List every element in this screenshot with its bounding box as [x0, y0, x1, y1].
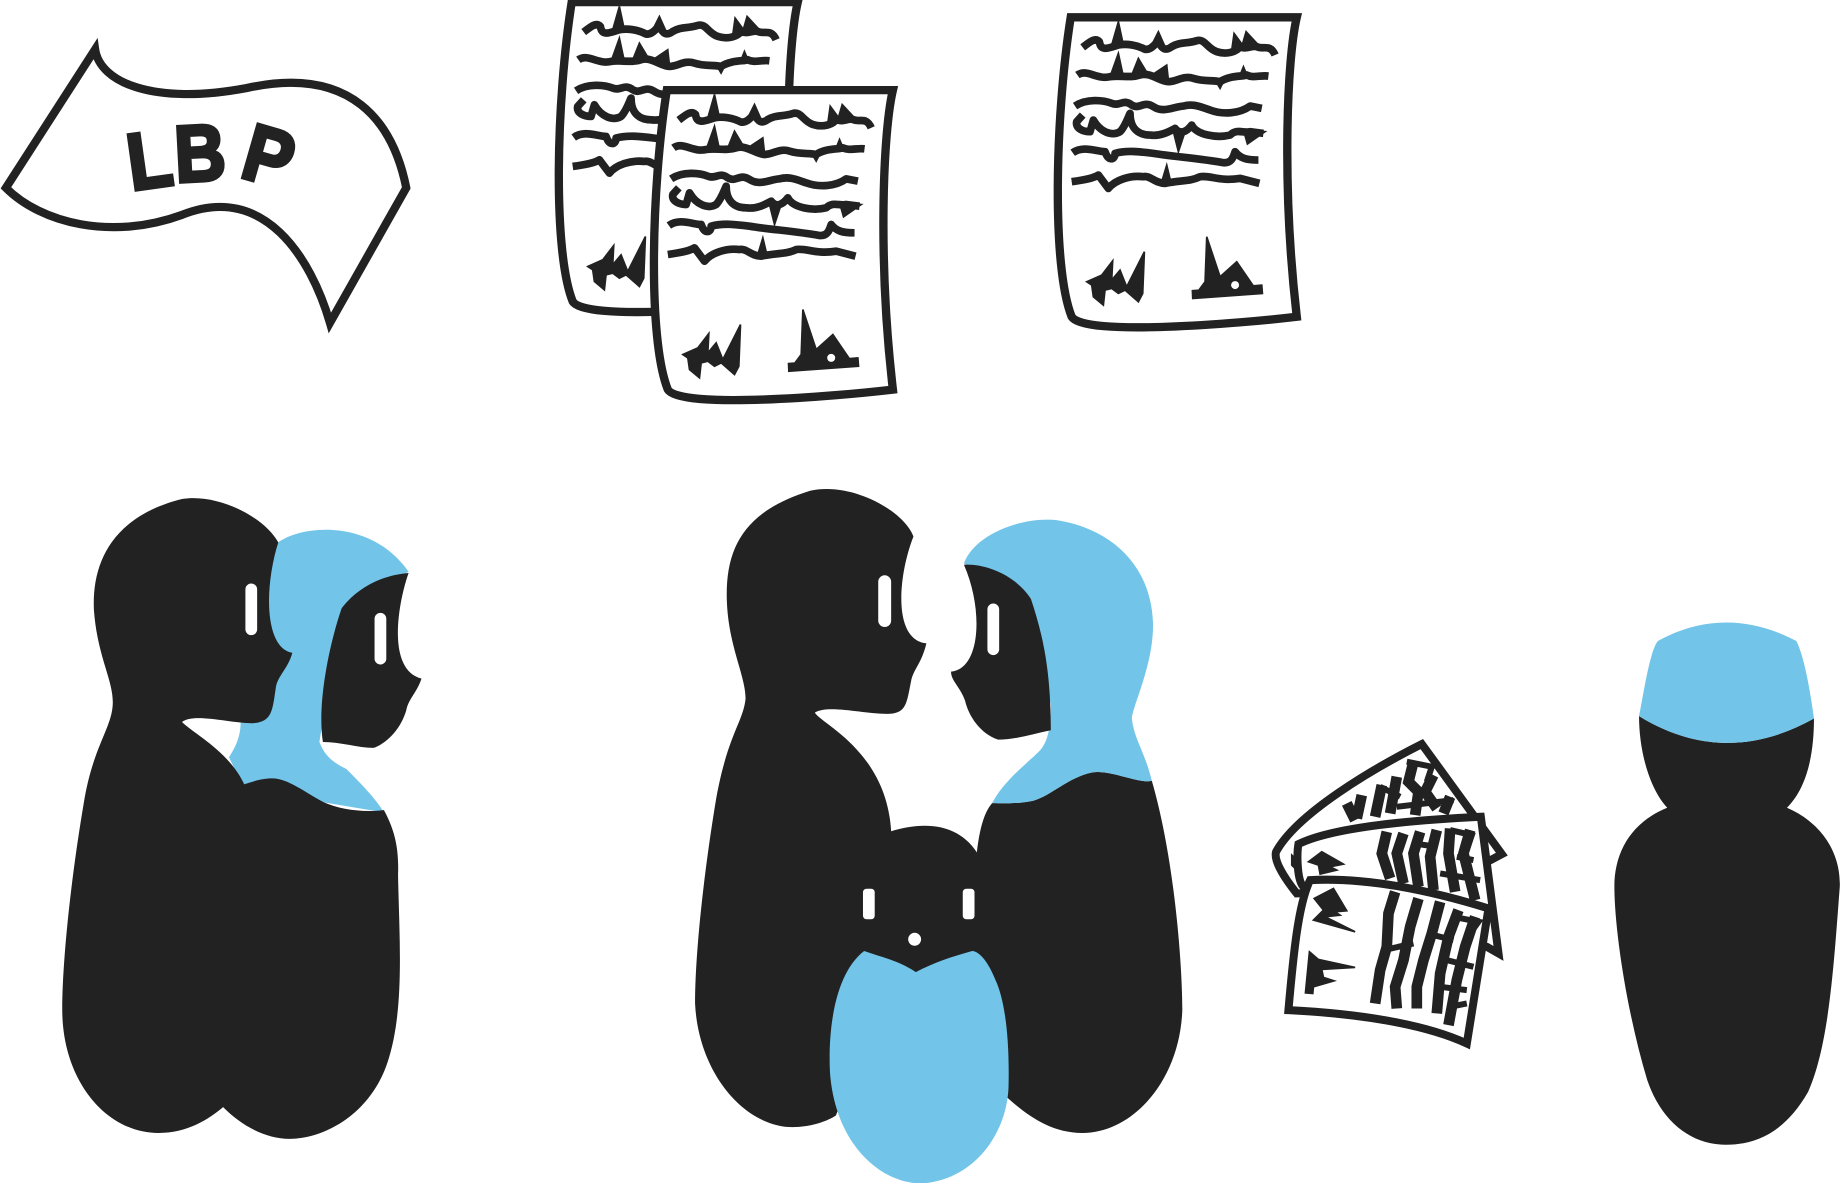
figure group: family in the centre [695, 489, 1182, 1183]
figure: single person with blue cap [1614, 623, 1840, 1145]
father's eye [878, 575, 891, 627]
woman's eye [375, 613, 386, 665]
mother with blue headscarf [939, 520, 1182, 1133]
icon: document right [1058, 17, 1297, 327]
back banknote [1276, 744, 1502, 893]
father in black [695, 489, 926, 1127]
woman with blue headscarf [211, 530, 422, 1139]
icon: document back left [559, 2, 798, 312]
child [829, 826, 1009, 1183]
figure group: couple on the left [62, 498, 422, 1139]
middle banknote [1292, 817, 1498, 953]
mother's eye [987, 603, 999, 655]
icon: document front centre [654, 90, 893, 400]
flag label: LBP: P [233, 107, 304, 206]
icon: stack of banknotes [1276, 744, 1502, 1043]
flag label: LBP: B [172, 107, 228, 199]
flag label: LBP: L [122, 113, 177, 208]
flag label: LBP [122, 107, 304, 208]
icon: LBP currency flag [6, 49, 406, 323]
front banknote [1288, 880, 1488, 1043]
blue cap [1639, 623, 1814, 743]
man in black [62, 498, 292, 1133]
man's eye [245, 584, 257, 635]
